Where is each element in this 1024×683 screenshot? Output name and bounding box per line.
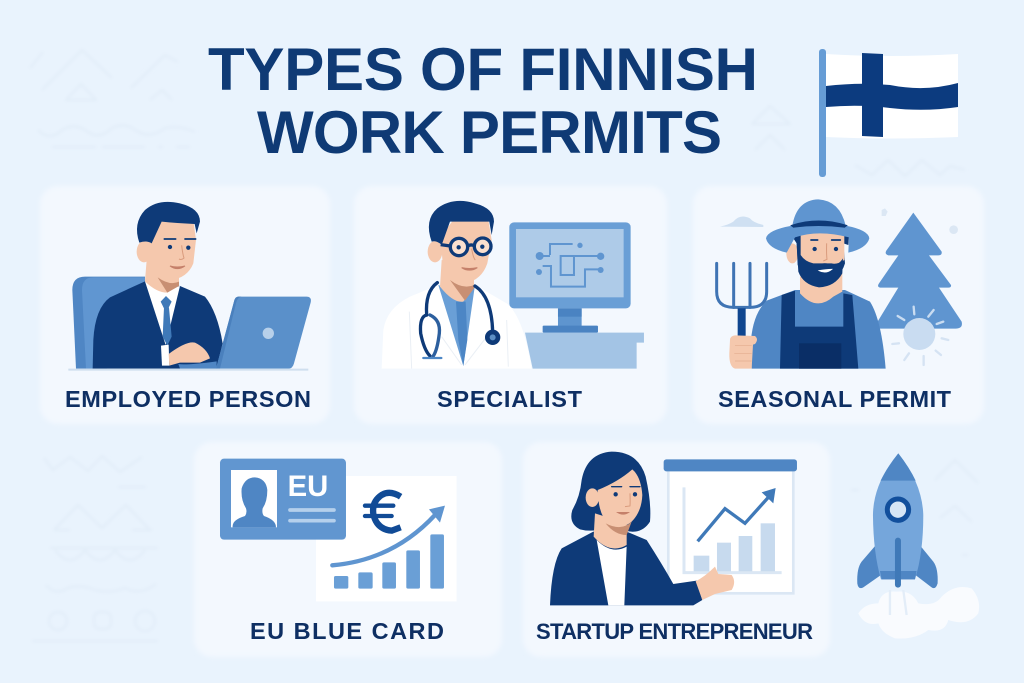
icon: Finnish flag — [819, 49, 958, 177]
label: startup entrepreneur: STARTUP ENTREPRENEUR — [536, 619, 813, 644]
title: WORK PERMITS — [257, 99, 722, 166]
title — [208, 36, 758, 166]
illustration: EU card and salary chart: EU — [288, 470, 328, 503]
title: TYPES OF FINNISH — [208, 36, 758, 103]
illustration: doctor and computer — [382, 201, 644, 369]
icon: rocket — [857, 453, 979, 639]
label: employed person: EMPLOYED PERSON — [65, 386, 311, 412]
smoke cloud — [858, 587, 979, 639]
panel: employed person — [40, 186, 330, 424]
panel: EU blue card — [194, 442, 502, 657]
illustration: woman presenting chart — [550, 452, 797, 605]
panel: startup entrepreneur — [523, 442, 830, 657]
label: seasonal permit: SEASONAL PERMIT — [718, 386, 952, 412]
illustration: EU card and salary chart — [220, 459, 457, 601]
panel: seasonal permit — [693, 186, 984, 424]
label: EU blue card: EU BLUE CARD — [250, 618, 444, 644]
panel: specialist — [354, 186, 667, 424]
illustration: man at laptop — [68, 202, 311, 370]
label: specialist: SPECIALIST — [437, 386, 583, 412]
illustration: farmer with pitchfork and tree — [717, 199, 962, 369]
